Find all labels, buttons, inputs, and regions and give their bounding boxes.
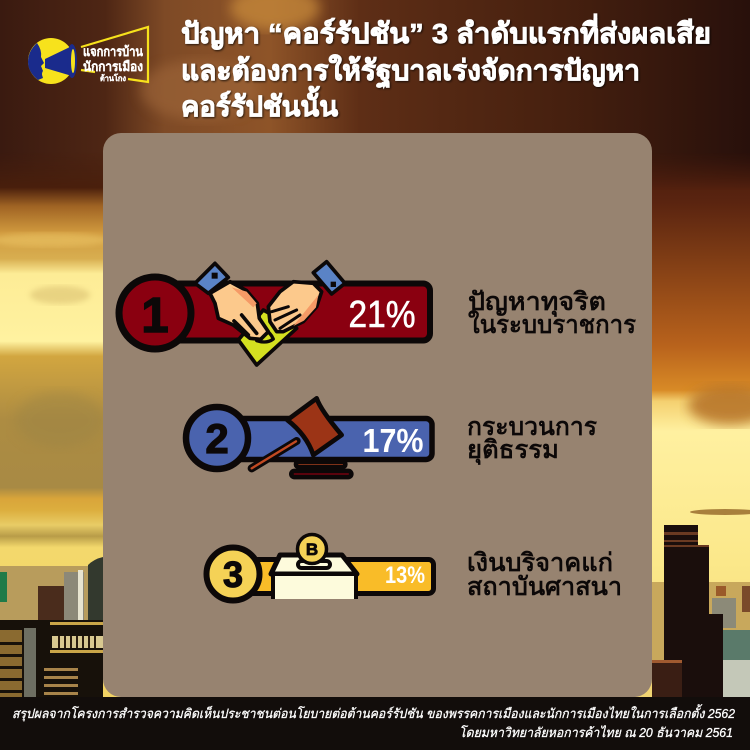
rank badge 1 [119,277,191,349]
label 2 [467,413,597,465]
logo text: ต้านโกง [100,73,126,83]
icon: hands passing a bribe [195,262,345,365]
icon: gavel [252,398,351,477]
logo text: แจกการบ้าน [83,44,143,59]
item 3 bar [206,534,434,600]
label 1 [468,288,636,339]
label 2: กระบวนการ [467,413,597,441]
value 17%: 17% [362,422,424,459]
source note [12,704,736,740]
bar: 13% [240,560,434,594]
rank badge 1: 1 [141,289,169,343]
rank badge 2 [186,407,248,469]
label 3 [467,549,622,601]
logo icon: megaphone in circle [28,38,77,84]
label 2: ยุติธรรม [467,436,559,465]
bar: 17% [220,418,432,460]
source note: โดยมหาวิทยาลัยหอการค้าไทย ณ 20 ธันวาคม 2561 [459,725,733,740]
title: ปัญหา “คอร์รัปชัน” 3 ลำดับแรกที่ส่งผลเสีย [181,13,711,50]
logo text: นักการเมือง [83,59,143,74]
label 1: ปัญหาทุจริต [468,288,606,317]
footer band [0,697,750,750]
rank badge 2: 2 [205,415,229,462]
label 3: สถาบันศาสนา [467,573,622,601]
title [181,13,711,122]
bar: 21% [160,284,430,340]
city skyline: right [652,525,750,697]
rank badge 3 [206,548,260,600]
logo [28,27,148,84]
item 2 bar [186,398,432,477]
panel: main content [103,133,652,697]
value 21%: 21% [348,294,416,336]
city skyline: left [0,557,103,697]
rank badge 3: 3 [223,554,243,595]
title: คอร์รัปชันนั้น [181,85,338,122]
icon: coin and donation box: B [306,540,318,559]
icon: coin and donation box [271,534,357,599]
logo frame [81,27,148,82]
logo text [83,44,143,83]
item 1 bar [119,262,430,365]
value 13%: 13% [385,562,425,589]
label 1: ในระบบราชการ [468,310,636,339]
title: และต้องการให้รัฐบาลเร่งจัดการปัญหา [181,54,640,89]
label 3: เงินบริจาคแก่ [467,549,613,577]
